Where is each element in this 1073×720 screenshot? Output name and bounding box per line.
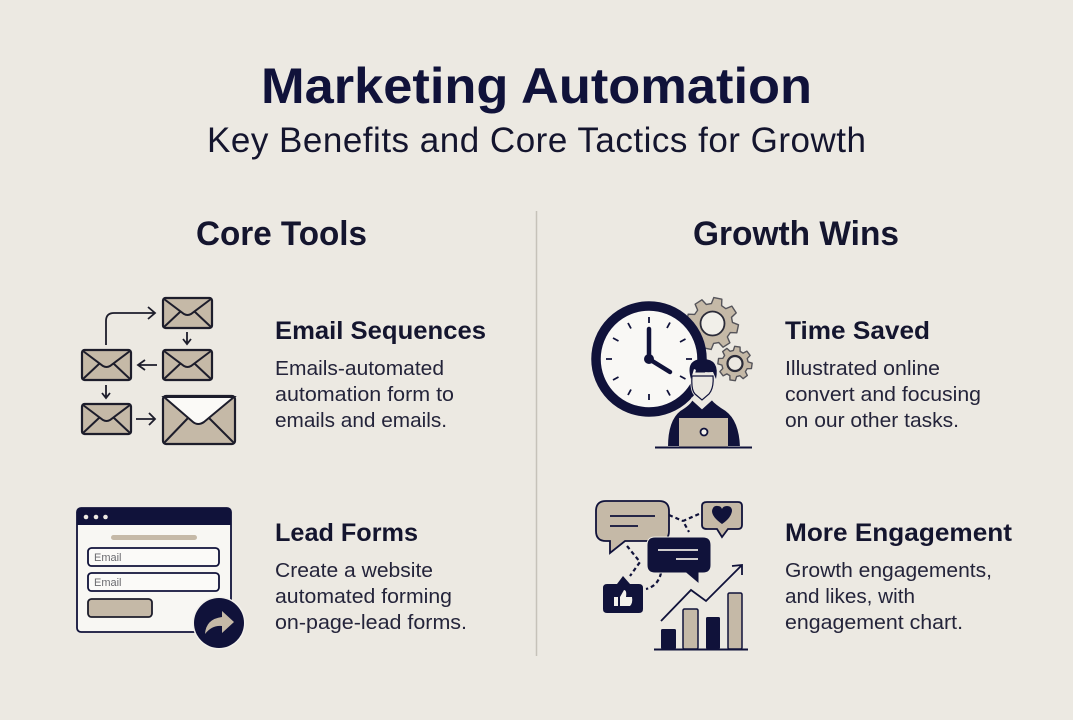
text: lead forms (275, 519, 467, 634)
text: lead forms: Lead Forms (275, 519, 418, 547)
icon: lead form (77, 508, 246, 650)
text: email sequences: automation form to (275, 384, 454, 406)
text: lead forms: on-page-lead forms. (275, 612, 467, 634)
text: lead forms: automated forming (275, 586, 452, 608)
text: time saved: convert and focusing (785, 384, 981, 406)
text: email sequences (275, 317, 486, 432)
panel: core tools (77, 215, 486, 650)
heading: core tools: Core Tools (196, 215, 367, 253)
text: more engagement: More Engagement (785, 519, 1013, 547)
panel: growth wins (596, 215, 1013, 650)
icon: email sequence (82, 298, 235, 444)
text: email sequences: Email Sequences (275, 317, 486, 345)
icon: time saved (596, 293, 754, 448)
heading: growth wins: Growth Wins (693, 215, 899, 253)
text: email sequences: Emails-automated (275, 358, 444, 380)
text: more engagement: and likes, with (785, 586, 915, 608)
text: time saved: Time Saved (785, 317, 930, 345)
text: time saved (785, 317, 981, 432)
icon: lead form: Email (94, 577, 122, 589)
subtitle: Key Benefits and Core Tactics for Growth (207, 121, 866, 160)
text: more engagement: engagement chart. (785, 612, 963, 634)
text: more engagement (785, 519, 1013, 634)
text: email sequences: emails and emails. (275, 410, 447, 432)
text: time saved: Illustrated online (785, 358, 940, 380)
icon: engagement (596, 501, 748, 650)
icon: lead form: Email (94, 552, 122, 564)
text: time saved: on our other tasks. (785, 410, 959, 432)
text: more engagement: Growth engagements, (785, 560, 992, 582)
title: Marketing Automation (261, 58, 812, 114)
text: lead forms: Create a website (275, 560, 433, 582)
